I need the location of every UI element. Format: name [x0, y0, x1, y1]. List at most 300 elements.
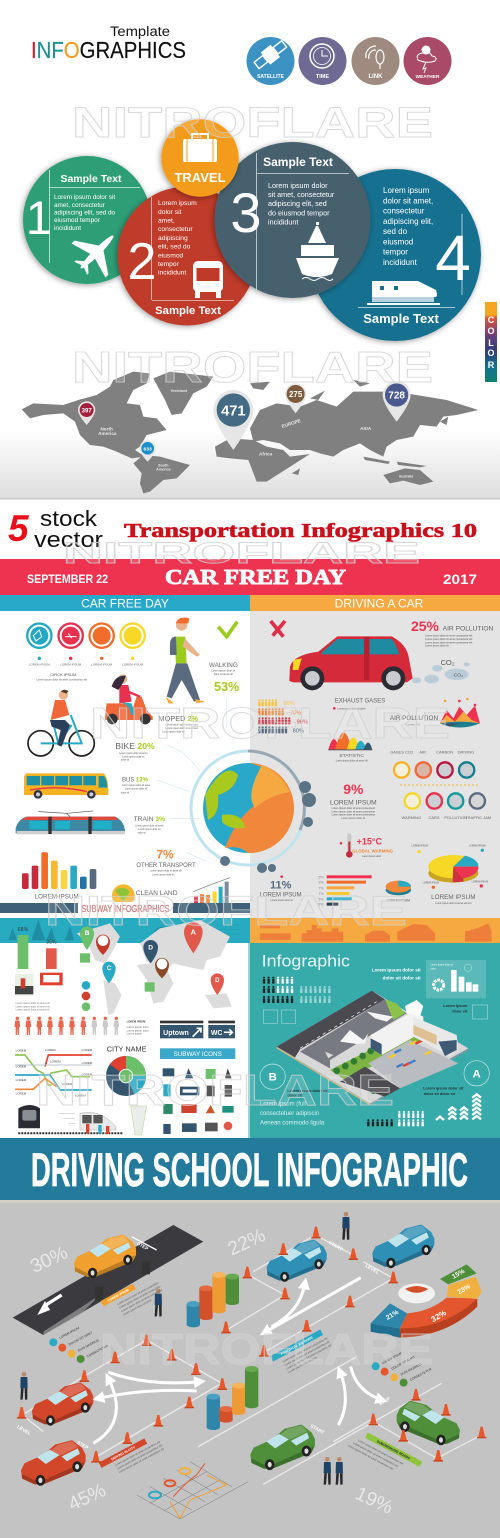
icon: time: TIME — [316, 74, 329, 80]
metro train front — [18, 1105, 123, 1133]
x mark — [271, 621, 285, 637]
subway lines map: LOREM — [16, 1049, 27, 1053]
step labels: LEVEL — [16, 1424, 32, 1436]
text block B: consectetuer adipiscin — [260, 1111, 319, 1117]
circle 1: plane: adipiscing elit, sed do — [54, 210, 116, 216]
subway lines map: LOREM — [82, 1073, 93, 1077]
logo words — [34, 506, 103, 552]
pin row 2 labels: TRAFFIC JAM — [465, 815, 491, 820]
horizontal bars: 7% — [318, 892, 324, 896]
label: train: Lorem ipsum dolor sit amet — [135, 824, 164, 827]
circle 4: train: sed do — [383, 227, 408, 236]
circle 4: train: dolor sit amet, — [383, 196, 433, 206]
title: Transportation Infographics 10: Transportation Infographics 10 — [124, 521, 477, 542]
label: train — [134, 816, 165, 835]
horizontal bars: 9% — [318, 881, 324, 885]
horizontal bars — [318, 875, 372, 907]
circle 2: bus: elit, sed do — [158, 244, 191, 250]
map pins: A — [191, 928, 197, 937]
icon: ship — [296, 222, 339, 280]
circle 1: plane: amet, consectetur — [54, 202, 106, 209]
world map: Australia — [399, 474, 413, 478]
track lines — [20, 1235, 482, 1484]
map pins: B — [85, 930, 90, 937]
subway lines map: LOREM — [16, 1091, 27, 1095]
circle 1: plane: eiusmod tempor — [54, 217, 101, 224]
right text: dolor sit — [452, 1009, 468, 1013]
icon: bus — [193, 261, 223, 298]
watermarks: NITROFLARE: NITROFLARE — [90, 699, 450, 748]
tag: road rules block: Lorem ipsum dolor sit amet consectetur — [118, 1284, 161, 1310]
header: CAR FREE DAY — [81, 596, 169, 610]
pin 275: 275 — [289, 390, 303, 399]
label: 11% — [260, 875, 302, 902]
subway lines map: LOREM — [16, 1078, 27, 1082]
subway lines map: LOREM — [16, 1065, 27, 1069]
label: bus: dolor sit — [121, 791, 129, 794]
heading: subway icons — [160, 1048, 235, 1059]
banner: 5 stock vector — [8, 506, 103, 552]
step labels: STEP — [136, 1241, 149, 1251]
label: bike — [115, 741, 155, 762]
big pie chart: Lorem ipsum dolor sit amet elit text — [435, 902, 472, 905]
watermarks: NITROFLARE: NITROFLARE — [100, 1325, 433, 1374]
map pins: D — [148, 944, 153, 951]
horizontal bars: 5% — [318, 897, 324, 901]
badge: color side tab: C — [488, 315, 495, 325]
legend left: DUIS MAXIMUS — [77, 1338, 100, 1353]
icon: link — [352, 37, 400, 85]
metro train side — [58, 1112, 116, 1134]
label: 11%: LOREM IPSUM — [260, 893, 302, 899]
check mark — [218, 622, 237, 637]
label: 9%: Lorem ipsum dolor sit amet consectetur — [332, 814, 375, 817]
label: air pollution 25%: Lorem ipsum dolor sit amet consectetur elit — [425, 641, 473, 644]
pin 471 — [213, 390, 253, 450]
pin row 2 labels — [402, 815, 491, 820]
small pie — [386, 881, 411, 903]
air pollution label — [390, 715, 438, 727]
top text: Lorem ipsum dolor sit — [372, 968, 421, 973]
big pie chart: LOREM IPSUM — [412, 846, 428, 848]
watermarks: NITROFLARE: NITROFLARE — [45, 887, 407, 934]
pin row 2 — [405, 793, 485, 809]
tag: orange rules block: Lorem ipsum dolor sit amet consectetur elit — [114, 1440, 161, 1467]
tag: practical block: Lorem ipsum dolor sit amet consectetur elit — [284, 1340, 330, 1367]
icon: link: LINK — [368, 74, 383, 80]
pin row 1 labels — [390, 750, 474, 755]
label: walking: 53% — [214, 680, 239, 694]
circle 4: train: Lorem ipsum — [383, 186, 430, 195]
text block B: dolor sit — [287, 1094, 303, 1098]
percent labels: 45% — [65, 1480, 109, 1515]
label: walking — [209, 662, 239, 694]
legend right: CONSECTETUR — [409, 1367, 433, 1382]
small outline icons — [263, 1005, 488, 1023]
label: 9%: Lorem ipsum dolor sit — [341, 817, 366, 820]
watermarks: NITROFLARE: NITROFLARE — [72, 99, 433, 147]
label: bus — [121, 778, 150, 794]
label: moped: Lorem ipsum dolor sit amet text — [165, 724, 198, 727]
percent labels: 30% — [27, 1242, 71, 1278]
header — [250, 595, 500, 611]
car: orange — [74, 1234, 136, 1278]
chart card: Lorem ipsum dolor sit — [431, 964, 453, 967]
big pie chart: LOREM IPSUM — [472, 882, 488, 884]
peaks chart — [328, 732, 372, 762]
label: other transport: Lorem ipsum dolor sit — [152, 873, 175, 876]
circle 2: bus — [118, 186, 256, 326]
chart card — [426, 960, 486, 998]
big pie chart — [412, 846, 488, 905]
label: walking: Lorem ipsum dolor sit — [211, 670, 235, 673]
big pie chart: LOREM IPSUM — [423, 883, 439, 885]
world map panel — [0, 372, 500, 500]
circle 1: plane: Sample Text — [60, 173, 122, 185]
round transport icons — [26, 622, 146, 666]
car: green — [250, 1425, 315, 1470]
planes — [340, 1030, 368, 1044]
label: walking: dolor sit amet elit — [214, 673, 233, 676]
global warming label: +15°C — [357, 836, 382, 846]
badge: color side tab: R — [488, 360, 495, 370]
tag: green rules block — [347, 1427, 422, 1481]
cones — [17, 1227, 487, 1463]
heading: subway icons: SUBWAY ICONS — [173, 1051, 222, 1058]
sign: uptown: Uptown — [163, 1030, 189, 1037]
figure: red car — [289, 636, 413, 690]
circle 4: train: consectetur — [383, 206, 425, 216]
emblem: A — [464, 1061, 489, 1086]
circle 3: ship: adipiscing elit, sed — [268, 199, 327, 208]
step labels: START — [309, 1423, 325, 1435]
parking lot — [368, 1040, 458, 1088]
circle 4: train: 4 — [435, 222, 471, 294]
pin 728 — [383, 381, 411, 422]
heading: Infographic: Infographic — [262, 952, 350, 971]
panel: driving a car — [250, 595, 500, 918]
watermarks: NITROFLARE: NITROFLARE — [36, 1066, 394, 1115]
circle 2: bus: eiusmod — [158, 252, 184, 260]
figure: bus — [24, 773, 108, 799]
title: template infographics — [31, 24, 186, 63]
right text: Lorem ipsum — [443, 1004, 468, 1008]
tag: green rules block: Lorem ipsum dolor sit amet consectetur elit — [352, 1441, 399, 1468]
global warming label: GLOBAL WARMING — [352, 848, 394, 853]
label: other transport — [136, 847, 196, 876]
circle 3: ship: Sample Text — [263, 155, 333, 169]
pin row 1 labels: DRIVING — [458, 750, 474, 755]
circle 4: train: Sample Text — [363, 311, 439, 326]
big pie chart: LOREM IPSUM — [469, 846, 486, 848]
emblem: B — [260, 1064, 285, 1089]
subway lines map: LOREM — [45, 1048, 56, 1052]
top text — [372, 968, 421, 980]
connector lines — [157, 698, 227, 862]
label: train: dolor sit — [138, 832, 146, 835]
tag: road rules block: Lorem ipsum dolor sit amet — [122, 1298, 153, 1317]
icon: satellite — [246, 37, 294, 85]
circle 1: plane: Lorem ipsum dolor sit — [54, 194, 115, 201]
label: moped: Lorem ipsum dolor sit — [162, 730, 185, 733]
people statistics: 90% — [297, 720, 308, 726]
header band: SUBWAY INFOGRAPHICS — [82, 904, 170, 915]
panel: driving school — [0, 1138, 500, 1538]
panel: transport circles — [23, 119, 481, 341]
label: walking: WALKING — [209, 662, 238, 669]
tag: practical block — [270, 1328, 334, 1378]
subway lines map: LOREM — [62, 1082, 73, 1086]
cylinder chart top — [187, 1272, 239, 1327]
percent labels: 22% — [225, 1225, 269, 1260]
map pins: C — [107, 965, 112, 972]
map pins — [80, 922, 224, 995]
tag: orange rules block: Lorem ipsum dolor sit amet consectetur elit — [118, 1447, 165, 1474]
figure: walker — [166, 618, 205, 703]
right text — [443, 1004, 468, 1013]
date: SEPTEMBER 22 — [27, 572, 108, 586]
subway lines map: LOREM — [82, 1048, 93, 1052]
arrows — [93, 1278, 382, 1443]
green strip with trees — [330, 1030, 423, 1080]
percent labels — [27, 1225, 396, 1519]
horizontal bars: 8% — [318, 903, 324, 907]
car: red — [32, 1382, 93, 1426]
caption — [16, 1002, 50, 1012]
label: moped: MOPED 2% — [159, 714, 199, 723]
pin row 1 — [394, 762, 474, 778]
logo words: stock — [40, 506, 98, 531]
icon: briefcase — [183, 134, 217, 162]
city name donut — [107, 1045, 147, 1090]
exhaust clouds CO2: CO₂ — [454, 673, 463, 679]
figure: moped rider — [105, 674, 153, 724]
icon: train — [367, 281, 440, 305]
step labels: START — [328, 1240, 344, 1252]
tag: orange rules block — [99, 1432, 165, 1480]
map background — [0, 430, 500, 498]
legend right: DUIS MAXIMUS — [400, 1362, 422, 1377]
people row: Lorem ipsum dolor — [127, 1028, 149, 1032]
pin 633: 633 — [143, 446, 152, 452]
tag: practical block: Lorem ipsum dolor sit amet — [287, 1355, 318, 1374]
subway lines map: LOREM — [75, 1094, 86, 1098]
label: air pollution 25%: Lorem ipsum dolor sit — [425, 645, 449, 648]
car: red second — [21, 1440, 86, 1486]
heading: INFOGRAPHICS: INFOGRAPHICS — [31, 37, 186, 63]
bar chart — [22, 852, 96, 900]
step labels: STEP — [378, 1396, 391, 1407]
panel: car free day — [0, 595, 250, 907]
text block B: Aenean commodo ligula — [260, 1121, 325, 1127]
panel: subway infographics — [0, 902, 250, 1138]
people row: LOREM IPSUM — [127, 1020, 146, 1024]
pin row 2 labels: CARS — [428, 815, 440, 820]
runway — [277, 991, 385, 1057]
circle: travel: TRAVEL — [174, 170, 226, 185]
caption: Lorem ipsum dolor sit amet consectetur elit — [36, 677, 87, 681]
circle: travel — [161, 119, 239, 197]
3d ring pie chart: 23% — [457, 1283, 472, 1296]
dark road lower — [340, 1067, 400, 1097]
world map: South — [158, 464, 168, 468]
sign: uptown — [160, 1021, 203, 1038]
label: air pollution 25%: 25% — [411, 618, 440, 634]
round legend — [82, 981, 90, 1011]
world map: EUROPE — [281, 418, 301, 429]
circle 1: plane: 1 — [26, 191, 52, 244]
icon: clean land globe — [112, 884, 135, 907]
legend left: LOREM IPSUM — [59, 1326, 80, 1340]
pin row 2 labels: POLLUTION — [444, 815, 467, 820]
circle 2: bus: 2 — [128, 233, 156, 291]
legend left — [49, 1326, 110, 1363]
legend right: LOREM IPSUM — [381, 1351, 403, 1365]
text block B — [260, 1089, 328, 1127]
thermometer — [340, 833, 353, 858]
tag: green rules block: SUBORDINATE ROADS — [376, 1439, 411, 1461]
world map — [77, 920, 232, 1015]
peaks chart: Lorem ipsum dolor sit amet elit — [336, 759, 368, 762]
global warming label — [352, 836, 394, 858]
year: 2017 — [443, 571, 477, 587]
circle 2: bus: incididunt — [158, 270, 186, 276]
label: 11%: Lorem ipsum dolor sit — [271, 899, 293, 902]
world map — [22, 372, 478, 493]
apron — [300, 999, 407, 1068]
big pie chart: LOREM IPSUM — [431, 894, 475, 901]
watermarks: NITROFLARE: NITROFLARE — [72, 343, 433, 392]
label: air pollution 25%: Lorem ipsum dolor sit amet consectetur elit — [425, 635, 473, 638]
caption: Lorem ipsum dolor sit amet elit — [16, 1009, 50, 1012]
air pollution label: AIR POLLUTION — [390, 715, 438, 722]
text block A — [423, 1087, 464, 1096]
caption: Lorem ipsum dolor sit amet elit — [16, 1002, 50, 1005]
escalator — [131, 1106, 147, 1135]
label: 11%: 11% — [270, 879, 292, 891]
circle 2: bus: adipiscing — [158, 235, 188, 242]
top text: dolor sit dolor sit — [383, 975, 421, 980]
circle 2: bus: Sample Text — [155, 305, 221, 317]
tag: orange rules block: Lorem ipsum dolor sit amet consectetur elit — [116, 1443, 163, 1470]
subtitle: Template: Template — [110, 24, 170, 39]
step labels: LEVEL — [364, 1263, 380, 1275]
map pins: D — [215, 978, 220, 984]
exhaust gases — [333, 699, 385, 710]
round transport icons: LOREM IPSUM — [122, 662, 144, 666]
people row: Lorem ipsum — [127, 1032, 143, 1036]
tree silhouettes — [8, 920, 240, 940]
circle 2: bus: dolor sit — [158, 209, 182, 216]
circle 4: train: eiusmod — [383, 238, 413, 246]
tag: road rules block: Lorem ipsum dolor sit amet consectetur — [117, 1281, 160, 1306]
pin 633 — [140, 440, 156, 462]
text block B: Lorem ipsum (full — [260, 1102, 306, 1108]
isometric airport — [277, 991, 468, 1105]
badge: color side tab — [485, 302, 497, 382]
chart card: dolor — [431, 968, 436, 971]
circle 2: bus: amet, — [158, 218, 175, 224]
divider — [0, 498, 500, 500]
panel: airport infographic — [250, 918, 500, 1138]
tag: orange rules block: DRIVING IN CITY — [111, 1445, 137, 1461]
label: 9%: Lorem ipsum dolor sit amet consectetur — [332, 807, 375, 810]
circle 2: bus: consectetur — [158, 226, 193, 233]
circle 2: bus: Lorem ipsum — [158, 200, 197, 207]
icon: time — [298, 37, 346, 85]
subway lines map: LOREM — [50, 1059, 61, 1063]
caption: CIRCK IPSUM — [50, 672, 76, 677]
header band — [0, 902, 250, 915]
world map: North — [100, 427, 113, 432]
world map: America — [98, 431, 117, 436]
label: bike: BIKE 20% — [115, 741, 155, 751]
label: 9% — [330, 781, 377, 820]
circle 4: train: tempor — [383, 248, 408, 256]
terminal — [371, 1012, 423, 1055]
badge: color side tab: O — [487, 326, 495, 336]
people row: Lorem ipsum dolor — [127, 1025, 149, 1029]
label: air pollution 25%: Lorem ipsum dolor sit amet consectetur elit — [425, 638, 473, 641]
label: train: Lorem ipsum dolor sit — [138, 828, 161, 831]
figure: tram — [16, 811, 125, 834]
circle 3: ship: incididunt — [268, 218, 298, 226]
city name donut: CITY NAME — [107, 1045, 147, 1054]
label: clean land: CLEAN LAND — [136, 890, 178, 897]
label: moped: Lorem ipsum dolor sit amet text — [165, 727, 198, 730]
circle 3: ship: Lorem ipsum dolor — [268, 181, 328, 190]
tag: road rules block: Lorem ipsum dolor sit amet consectetur — [120, 1288, 163, 1313]
teal scene band — [0, 918, 250, 943]
3d ring pie chart: 32% — [430, 1308, 448, 1324]
round transport icons: LOREM IPSUM — [91, 662, 113, 666]
percent bars — [18, 927, 57, 969]
badge: color side tab: L — [488, 338, 494, 348]
globe — [191, 751, 316, 873]
band title: CAR FREE DAY — [165, 565, 347, 589]
tag: practical block: Lorem ipsum dolor sit amet consectetur elit — [285, 1343, 332, 1370]
circle 3: ship: do eiusmod tempor — [268, 208, 330, 218]
watermarks: NITROFLARE: NITROFLARE — [63, 537, 420, 570]
subway icons grid — [163, 1068, 234, 1134]
icon row: satellite, time, link, weather — [246, 37, 452, 85]
pin 397: 397 — [82, 408, 92, 414]
people statistics: 80% — [293, 729, 304, 735]
subway lines map: LOREM — [82, 1061, 93, 1065]
icon: weather: WEATHER — [416, 74, 440, 80]
3d ring pie chart: 15% — [451, 1268, 466, 1281]
pin 397 — [78, 401, 95, 425]
tag: green rules block: Lorem ipsum dolor sit amet consectetur elit — [347, 1443, 394, 1471]
3d ring pie chart: 21% — [385, 1309, 400, 1322]
mountains chart — [440, 698, 480, 727]
label: 9%: 9% — [343, 781, 364, 797]
label: moped — [159, 714, 199, 733]
figure: cyclist — [28, 690, 94, 756]
horizontal bars: 7% — [318, 886, 324, 890]
header — [0, 595, 250, 611]
label: bus: BUS 13% — [122, 778, 149, 784]
elevated road — [13, 1225, 203, 1335]
label: 9%: Lorem ipsum dolor sit amet consectetur — [332, 810, 375, 813]
label: bike: dolor sit — [121, 759, 129, 762]
3d ring pie chart — [371, 1264, 482, 1338]
tag: road rules block — [101, 1273, 165, 1323]
global warming label: Lorem ipsum dolor — [362, 855, 382, 858]
people row — [14, 1017, 149, 1036]
label: bike: Lorem ipsum dolor sit amet — [119, 752, 148, 755]
tag: practical block: Lorem ipsum dolor sit amet consectetur elit — [282, 1336, 329, 1363]
